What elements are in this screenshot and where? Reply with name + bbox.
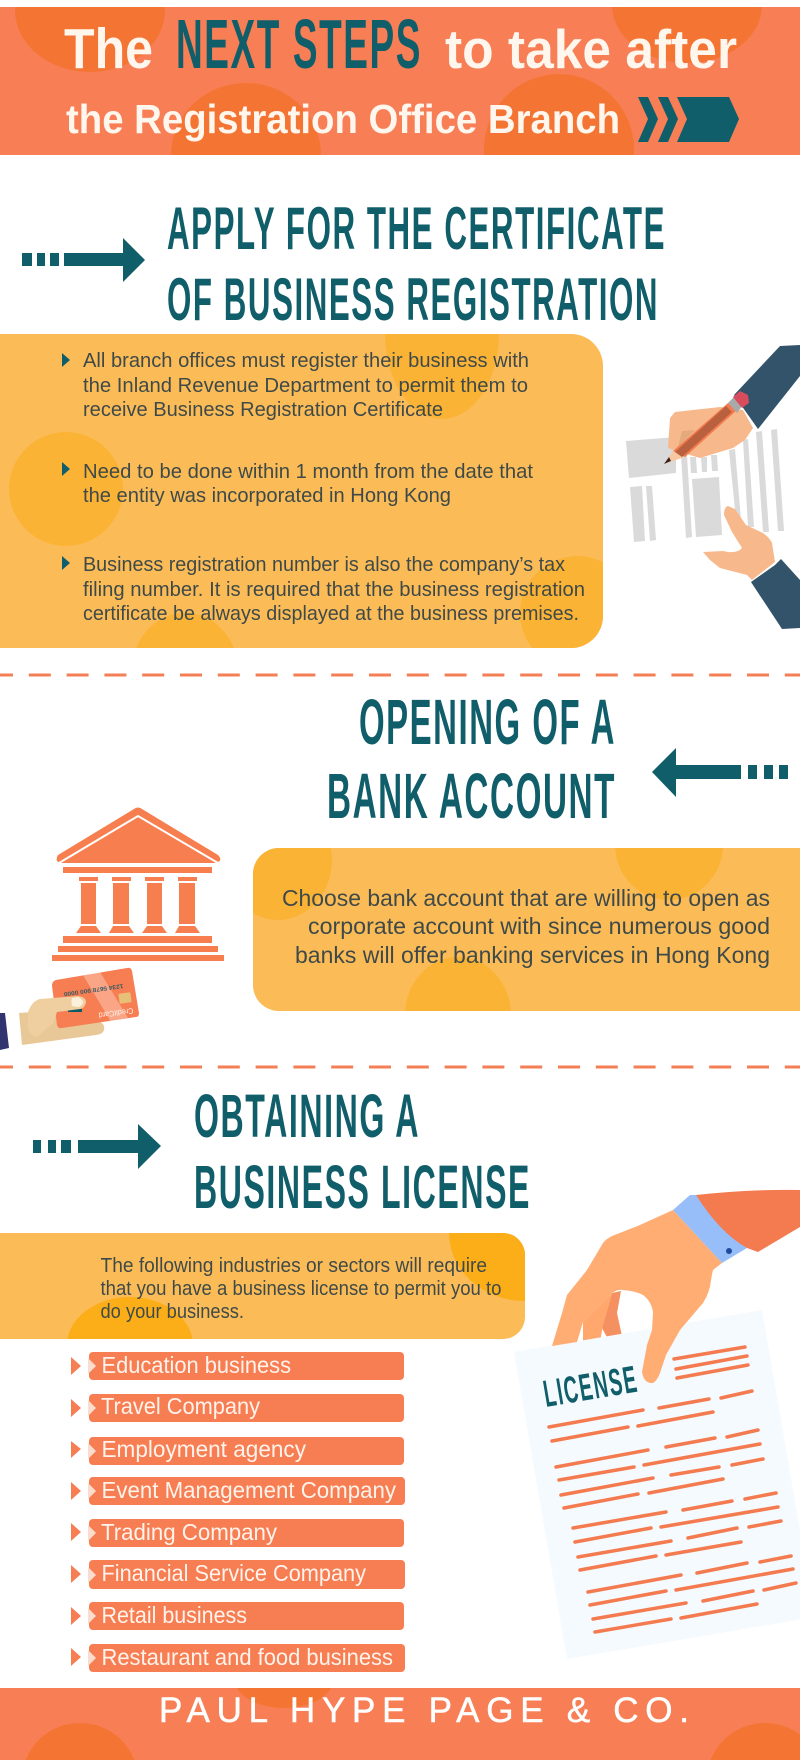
icon: hands signing document	[626, 345, 800, 629]
license intro text	[100, 1255, 502, 1323]
license intro text: The following industries or sectors will require	[100, 1255, 487, 1277]
title line 1: The	[64, 17, 153, 81]
arrow: section 3	[33, 1124, 161, 1169]
bullet: register with IRD: All branch offices must register their business with	[83, 349, 529, 372]
title line 1: to take after	[445, 18, 737, 80]
title line 2: the Registration Office Branch	[66, 96, 620, 142]
header banner	[0, 7, 800, 155]
license intro text: that you have a business license to permit you to	[100, 1278, 502, 1300]
item: retail: Retail business	[102, 1602, 247, 1628]
bullet: register with IRD: the Inland Revenue Department to permit them to	[83, 374, 528, 397]
icon: hand holding credit card: CreditCard	[98, 1006, 134, 1020]
icon: hand holding credit card: 1234 5678 900 0000	[63, 982, 124, 996]
panel: license intro	[0, 1233, 525, 1339]
bullet: within 1 month	[62, 460, 533, 507]
bullet: tax filing number: Business registration number is also the company’s tax	[83, 553, 566, 576]
footer banner	[0, 1688, 800, 1760]
bullet: register with IRD	[62, 349, 529, 421]
divider	[0, 674, 800, 676]
heading: obtaining a business license	[194, 1082, 531, 1221]
bullet: register with IRD: receive Business Registration Certificate	[83, 398, 443, 421]
bank account text: corporate account with since numerous good	[308, 913, 770, 939]
item: trading	[71, 1519, 404, 1547]
item: restaurant: Restaurant and food business	[102, 1644, 393, 1670]
bullet: tax filing number	[62, 553, 585, 625]
item: financial service: Financial Service Company	[102, 1560, 366, 1586]
item: retail	[71, 1602, 404, 1630]
license label: LICENSE	[540, 1359, 641, 1416]
bullet: within 1 month: the entity was incorporated in Hong Kong	[83, 484, 451, 507]
title line 1: NEXT STEPS	[176, 5, 422, 83]
panel: certificate details	[0, 334, 603, 648]
icon: bank building	[52, 808, 224, 961]
title line 1	[64, 5, 737, 83]
item: travel: Travel Company	[101, 1393, 260, 1419]
heading: obtaining a business license: OBTAINING A	[194, 1082, 420, 1150]
item: employment	[71, 1436, 404, 1465]
bullet: tax filing number: certificate be always displayed at the business premises.	[83, 602, 579, 625]
item: education	[71, 1352, 404, 1380]
panel: bank account note	[253, 848, 800, 1011]
bullet: within 1 month: Need to be done within 1 month from the date that	[83, 460, 533, 483]
arrow: section 2	[652, 748, 788, 797]
bank account text	[282, 885, 770, 968]
bank account text: banks will offer banking services in Hong Kong	[295, 942, 770, 968]
license intro text: do your business.	[100, 1301, 244, 1323]
bank account text: Choose bank account that are willing to open as	[282, 885, 770, 911]
list: industries	[71, 1352, 405, 1672]
item: education: Education business	[102, 1352, 291, 1378]
icon: hand holding license document	[514, 1190, 800, 1659]
icon: hand holding credit card	[0, 968, 139, 1050]
license text lines	[549, 1347, 796, 1632]
arrow: section 1	[22, 238, 145, 282]
bullet: tax filing number: filing number. It is required that the business registration	[83, 578, 585, 601]
heading: opening of a bank account	[327, 686, 616, 832]
divider	[0, 1066, 800, 1068]
heading: apply for the certificate	[167, 195, 666, 333]
footer company name: PAUL HYPE PAGE & CO.	[159, 1691, 689, 1730]
item: trading: Trading Company	[101, 1519, 277, 1545]
icon: header chevrons	[638, 97, 739, 142]
item: employment: Employment agency	[102, 1436, 306, 1462]
item: event management: Event Management Company	[102, 1477, 396, 1503]
item: travel	[71, 1393, 404, 1422]
